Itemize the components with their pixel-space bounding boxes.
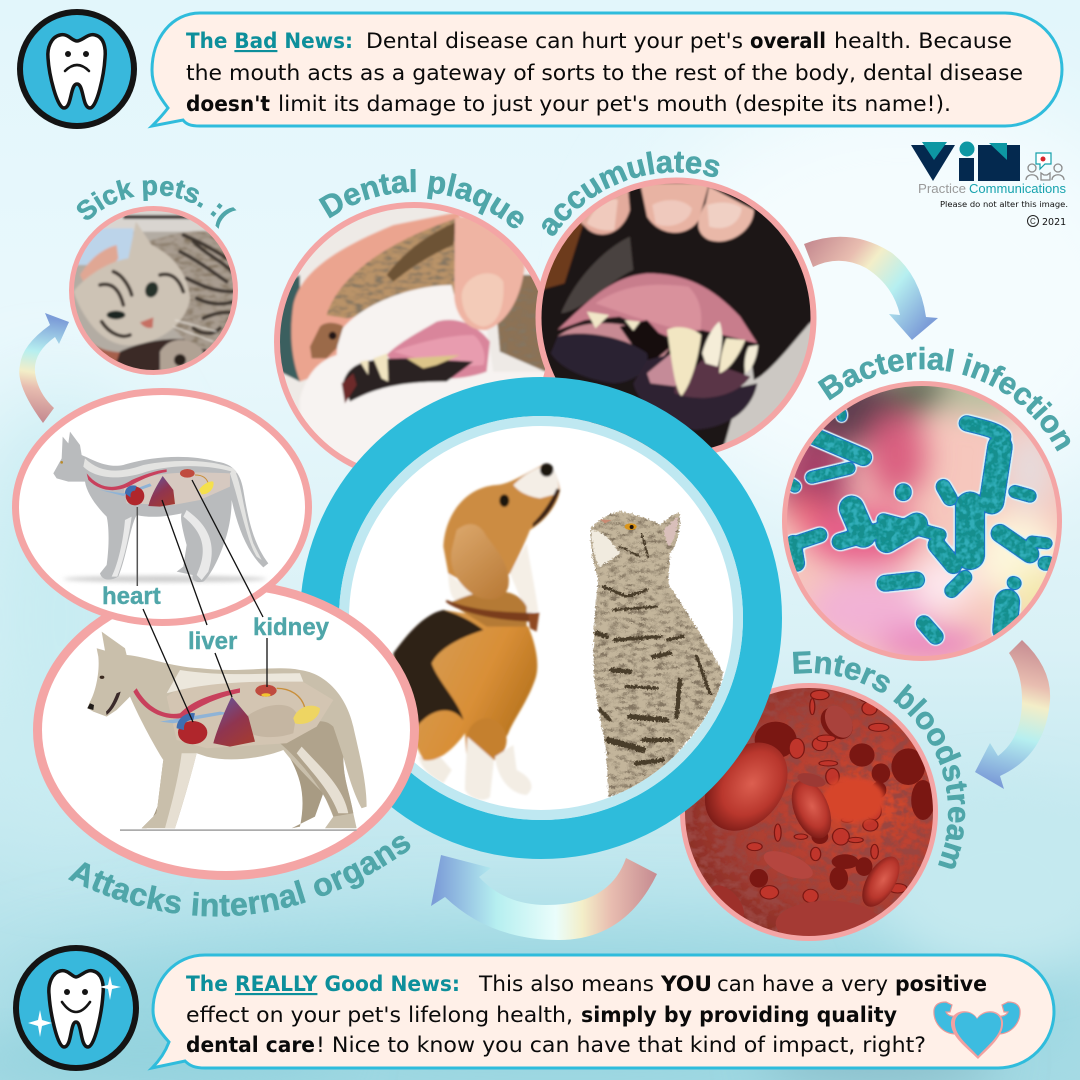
illustration: cat with organs: [53, 432, 268, 582]
good news text: effect on your pet's lifelong health,: [186, 1003, 573, 1028]
good news text: dental care: [186, 1033, 315, 1058]
panel: dog anatomy: [38, 584, 414, 876]
photo: sick cat: [69, 206, 238, 375]
bad news text: limit its damage to just your pet's mouth (despite its name!).: [278, 92, 951, 117]
heading: sick pets: Sick pets. :(: [76, 180, 236, 229]
logo: VIN Practice Communications: C: [1030, 217, 1036, 226]
good news text: YOU: [660, 972, 712, 997]
bad news text: health. Because: [834, 29, 1012, 54]
speech bubble: bad news: [152, 13, 1062, 126]
logo: VIN Practice Communications: [911, 142, 1068, 228]
arrow: bacteria to bloodstream: [975, 640, 1050, 789]
bad news text: Dental disease can hurt your pet's: [366, 29, 743, 54]
heading: enters bloodstream: Enters bloodstream: [793, 651, 967, 869]
heading: attacks internal organs: Attacks internal organs: [68, 836, 410, 917]
speech bubble: good news: [152, 955, 1054, 1068]
bad news text: doesn't: [186, 92, 270, 117]
heading: bacterial infection: Bacterial infection: [818, 346, 1070, 452]
logo: VIN Practice Communications: Practice: [918, 181, 966, 196]
arrow: bloodstream to organs: [431, 855, 657, 940]
central ring with dog and cat: [320, 396, 762, 840]
photo: beagle: [393, 463, 723, 800]
logo: VIN Practice Communications: Communications: [969, 181, 1066, 196]
good news text: ! Nice to know you can have that kind of impact, right?: [316, 1033, 926, 1058]
photo: red blood cells: [673, 680, 946, 947]
icon: happy sparkling tooth: [16, 948, 136, 1068]
arrow: organs to sick pets: [19, 313, 69, 423]
logo: VIN Practice Communications: Please do not alter this image.: [940, 200, 1068, 209]
logo: VIN Practice Communications: 2021: [1042, 217, 1066, 228]
photo: tabby cat: [591, 512, 723, 797]
photo: cat mouth with plaque: [274, 202, 548, 480]
illustration: dog with organs: [87, 632, 367, 831]
icon: muscular heart: [934, 1002, 1020, 1059]
photo: dog mouth with tartar: [536, 178, 816, 458]
good news text: positive: [895, 972, 987, 997]
good news text: The REALLY Good News:: [186, 972, 460, 997]
bad news text: The Bad News:: [186, 29, 353, 54]
heading: accumulates: accumulates: [542, 151, 720, 236]
arrow: plaque to bacteria: [804, 237, 938, 340]
label: liver: liver: [188, 628, 237, 655]
label: kidney: kidney: [253, 614, 330, 641]
icon: sad tooth: [20, 12, 134, 126]
photo: bacteria: [777, 368, 1067, 667]
good news text: [186, 972, 987, 1058]
heading: dental plaque: Dental plaque: [318, 169, 524, 228]
good news text: This also means: [478, 972, 654, 997]
panel: cat anatomy: [16, 392, 308, 622]
good news text: simply by providing quality: [581, 1003, 897, 1028]
label: heart: heart: [102, 583, 161, 610]
bad news text: the mouth acts as a gateway of sorts to the rest of the body, dental disease: [186, 61, 1023, 86]
good news text: can have a very: [717, 972, 888, 997]
leader lines: organs: [137, 480, 267, 722]
bad news text: overall: [750, 29, 826, 54]
bad news text: [186, 29, 1023, 117]
